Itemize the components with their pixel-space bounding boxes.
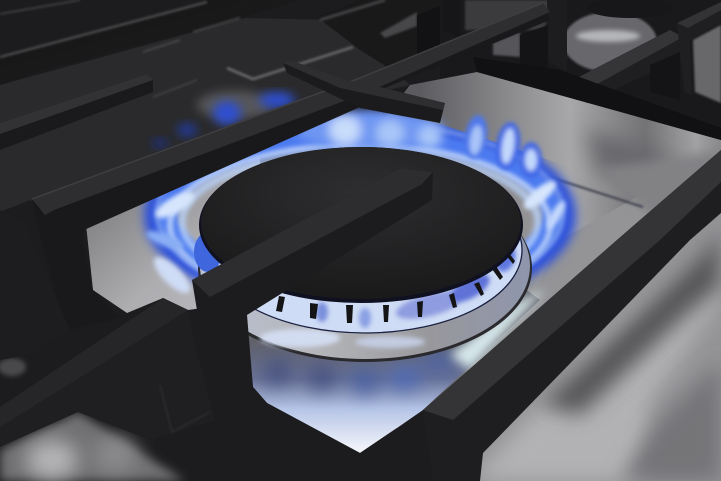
- flame tongues: [295, 110, 445, 150]
- rear grate lines: [0, 0, 450, 97]
- main stainless surface: [85, 72, 721, 481]
- lower left surface reflection: [0, 358, 185, 481]
- burner cap: [199, 147, 523, 303]
- upper left short bar: [0, 74, 153, 150]
- far flames behind bar: [152, 92, 295, 148]
- grate: front bar with leg: [192, 168, 433, 481]
- grate: rear bar, left leg and cross bar: [32, 3, 550, 330]
- grate: lower left bars: [0, 210, 215, 447]
- grate: top right bars: [473, 2, 721, 140]
- grate: right front bar with leg: [423, 150, 721, 481]
- blue port band: [316, 241, 519, 328]
- burner flame port slits: [276, 253, 515, 323]
- back right steel and burner: [417, 0, 721, 140]
- burner base ring: [194, 167, 532, 362]
- blue flame glow: [155, 123, 565, 305]
- lower flames under ring: [245, 270, 545, 453]
